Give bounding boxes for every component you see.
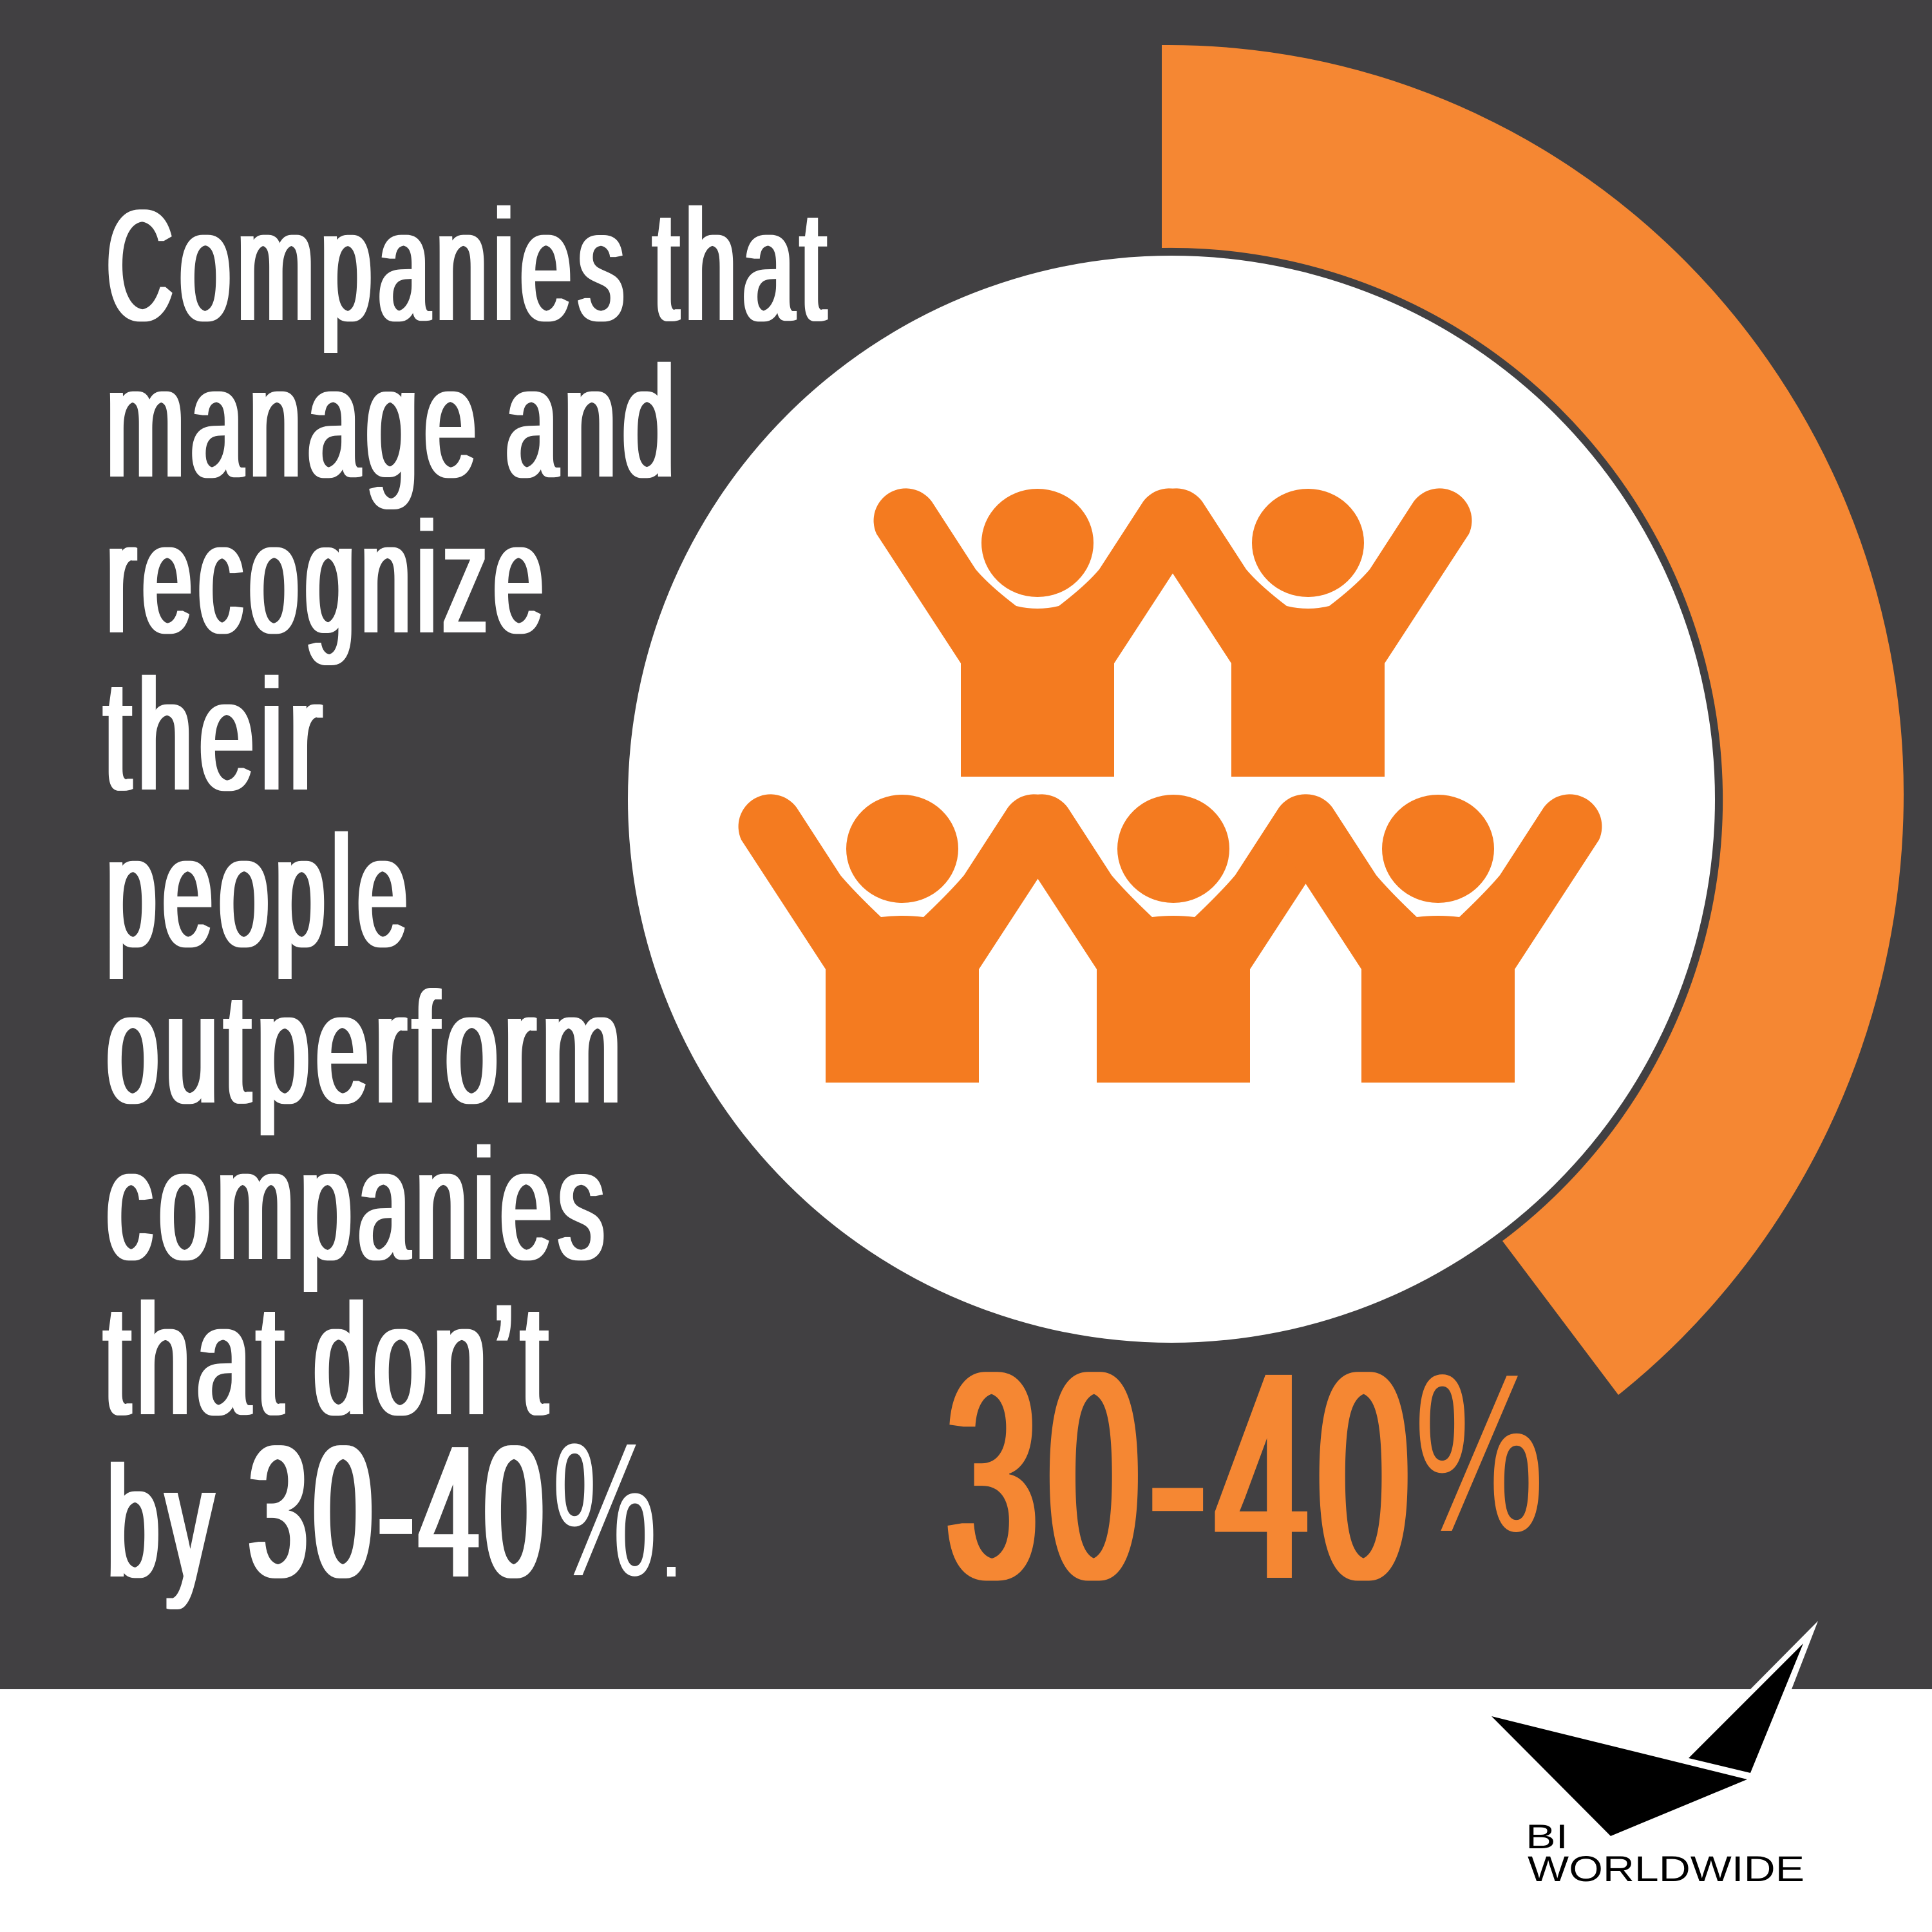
headline text block: Companies that (106, 177, 832, 354)
person: top row left (874, 488, 1201, 777)
white circle (628, 256, 1715, 1343)
orange progress arc (1162, 45, 1904, 1395)
big statistic 30-40%: % (1414, 1327, 1544, 1579)
logo mark (1492, 1621, 1818, 1836)
headline text block: 30-40 (249, 1406, 549, 1616)
person: bottom row right (1274, 794, 1602, 1083)
headline text block: their (104, 647, 328, 824)
person: bottom row centre (1010, 794, 1337, 1083)
headline text block: that don’t (104, 1271, 554, 1448)
headline text block: manage and (106, 334, 681, 511)
headline text block (104, 177, 832, 1616)
logo wordmark: BI (1526, 1818, 1568, 1856)
headline text block: by (107, 1434, 220, 1611)
headline text block: % (552, 1403, 658, 1616)
headline text block: people (106, 803, 413, 980)
headline text block: companies (106, 1116, 611, 1293)
person: bottom row left (739, 794, 1066, 1083)
logo: BI Worldwide (1492, 1621, 1818, 1889)
icon: group of five people with raised arms (739, 488, 1602, 1083)
headline text block: recognize (106, 489, 549, 667)
big statistic 30-40%: 30-40 (947, 1311, 1421, 1641)
headline text block: outperform (106, 960, 627, 1137)
headline text block: . (659, 1495, 684, 1596)
logo wordmark (1526, 1818, 1804, 1889)
big statistic 30-40% (947, 1311, 1544, 1641)
person: top row right (1144, 488, 1472, 777)
logo wordmark: WORLDWIDE (1528, 1848, 1804, 1889)
